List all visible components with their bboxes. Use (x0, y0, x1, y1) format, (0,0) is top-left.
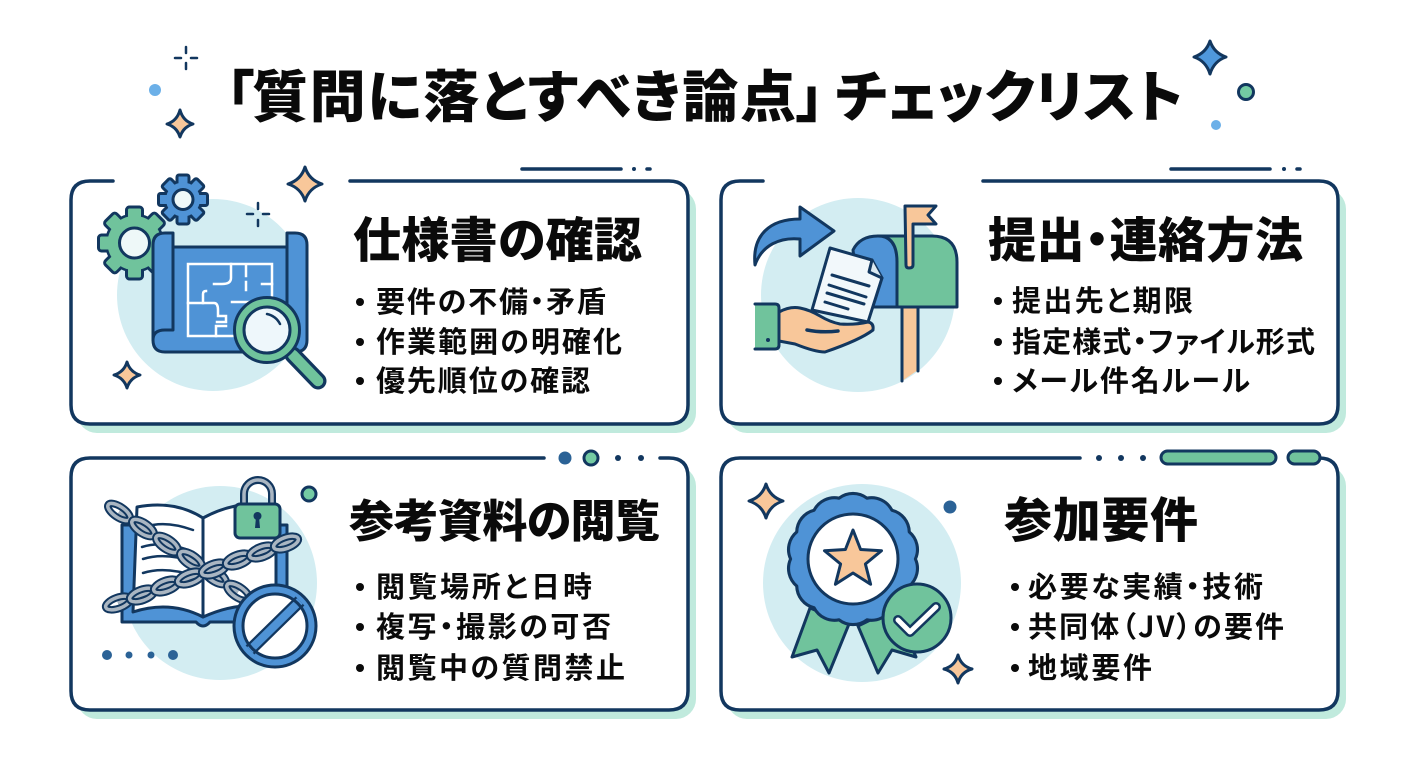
list (994, 278, 1315, 400)
title: 「 (226, 53, 254, 134)
list: 複写・撮影の可否 (376, 604, 611, 646)
icon: blueprint with gears and magnifier (98, 167, 322, 391)
heading: 仕様書の確認 (353, 201, 642, 271)
list (1011, 564, 1284, 687)
panel: 参加要件 (720, 451, 1346, 719)
title: 」 (796, 53, 824, 134)
list: 共同体（JV）の要件 (1028, 604, 1284, 646)
title (226, 53, 1183, 134)
panel: 参考資料の閲覧 (70, 451, 696, 719)
list: メール件名ルール (1012, 358, 1250, 400)
title: チェックリスト (835, 53, 1183, 134)
heading: 参考資料の閲覧 (349, 485, 660, 550)
heading: 提出・連絡方法 (988, 201, 1303, 271)
title decorations (149, 41, 1254, 137)
panel: 提出・連絡方法 (720, 167, 1346, 433)
list: 閲覧中の質問禁止 (376, 645, 625, 687)
list (356, 279, 622, 400)
list: 指定様式・ファイル形式 (1012, 319, 1315, 361)
icon: chained book with padlock (102, 480, 317, 680)
list: 要件の不備・矛盾 (376, 279, 606, 321)
list: 作業範囲の明確化 (376, 319, 622, 361)
heading: 参加要件 (1004, 481, 1198, 551)
list: 提出先と期限 (1012, 278, 1193, 320)
list (356, 564, 625, 687)
list: 閲覧場所と日時 (376, 564, 592, 606)
list: 優先順位の確認 (376, 358, 590, 400)
title: 質問に落とすべき論点 (252, 53, 796, 134)
icon: award rosette with check badge (749, 484, 972, 683)
list: 必要な実績・技術 (1028, 564, 1263, 606)
panel: 仕様書の確認 (70, 167, 696, 433)
list: 地域要件 (1028, 645, 1152, 687)
icon: hand delivering document to mailbox (755, 198, 957, 392)
